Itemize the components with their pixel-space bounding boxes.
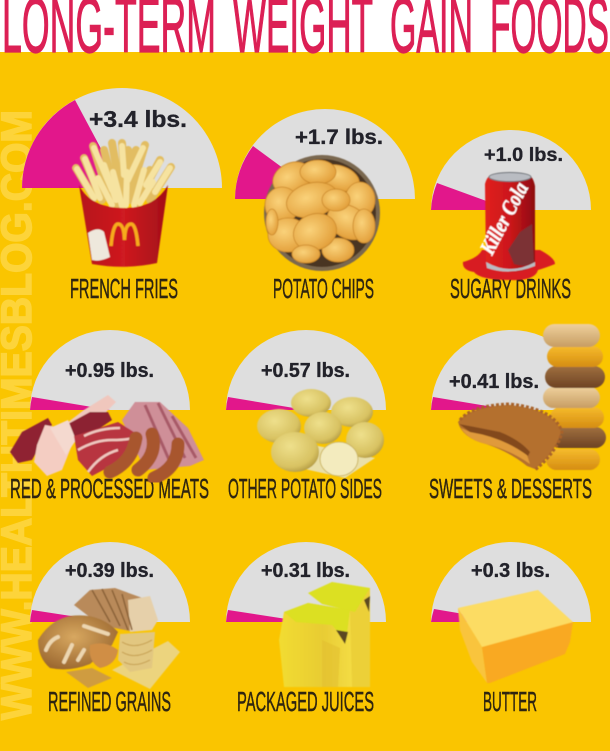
gauge: juices [226,542,386,622]
icon: fries in red box [76,143,171,267]
panel: other potato sides [226,330,386,504]
value: juices: +0.31 lbs. [261,560,350,582]
value: french fries: +3.4 lbs. [89,106,187,132]
icon: assorted meats [10,395,204,478]
label: red meats: RED & PROCESSED MEATS [10,473,209,504]
gauge: red meats [30,330,190,410]
gauge: potato chips [235,109,415,199]
label: grains: REFINED GRAINS [48,686,171,717]
icon: soda can: Killer Cola [474,178,533,259]
panel: sugary drinks [431,130,591,304]
label: french fries: FRENCH FRIES [70,273,178,304]
panel: refined grains [30,542,190,717]
icon: butter block [458,590,573,683]
icon: juice cartons [279,582,370,687]
icon: potatoes [257,389,384,478]
gauge: french fries [22,88,222,188]
panel: french fries [22,88,222,304]
panel: sweets and desserts [429,324,606,504]
value: grains: +0.39 lbs. [65,560,154,582]
gauge: grains [30,542,190,622]
panel: butter [431,542,591,717]
icon: bowl of chips [264,155,380,271]
label: juices: PACKAGED JUICES [237,686,374,717]
value: potato sides: +0.57 lbs. [261,360,350,382]
panel: potato chips [235,109,415,304]
icon: bagels and peanut butter cup [458,324,606,470]
panel: butter: BUTTER [483,686,537,717]
header band [0,0,610,52]
value: red meats: +0.95 lbs. [65,360,154,382]
panel: red and processed meats [10,330,209,504]
gauge: potato sides [226,330,386,410]
panel: packaged juices [226,542,386,717]
gauge: sugary drinks [431,130,591,210]
gauge: butter [431,542,591,622]
value: potato chips: +1.7 lbs. [295,126,383,149]
value: sugary drinks: +1.0 lbs. [484,145,563,166]
value: sweets: +0.41 lbs. [449,371,539,393]
panel: potato chips: POTATO CHIPS [273,273,374,304]
icon: soda can [463,172,555,280]
panel: other potato sides: OTHER POTATO SIDES [228,473,382,504]
icon: bread, rolls and pasta [38,588,180,689]
value: butter: +0.3 lbs. [471,560,550,582]
gauge: sweets [431,330,591,410]
